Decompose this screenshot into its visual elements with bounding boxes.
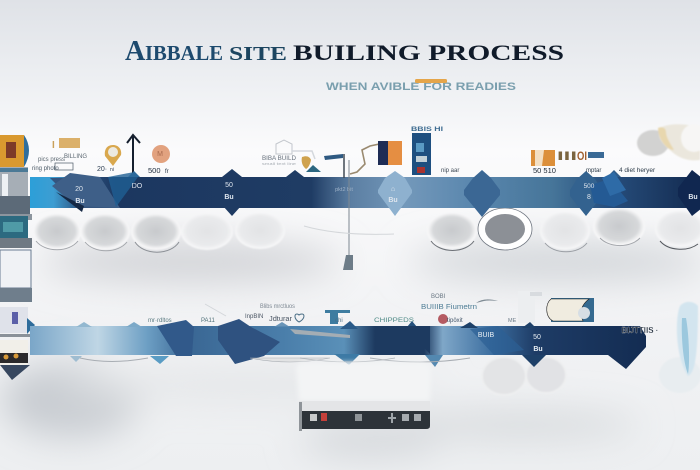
icon: grey house and lamp: small text line: [262, 161, 297, 166]
icon: gold pin: 20·: [97, 166, 107, 173]
icon: blue tablet: BBIS HI: [411, 126, 443, 133]
label: nip aar: [441, 168, 459, 174]
icon: gold pin: ni: [110, 167, 114, 173]
subtitle: [326, 79, 516, 93]
icon: folder with lamp: [350, 141, 402, 174]
icon: orange medal: fr: [165, 169, 169, 175]
bottom row icons and labels: BOBI: [431, 294, 446, 300]
bottom row icons and labels: PA11: [201, 318, 215, 324]
subtitle: WHEN AVIBLE FOR READIES: [326, 81, 516, 93]
card: [547, 298, 594, 322]
top dishes row: [33, 208, 700, 252]
band labels top: 500: [584, 183, 595, 190]
icon: orange badge: OI: [577, 149, 587, 163]
bottom row icons and labels: tipöxit: [447, 318, 463, 324]
bottom timeline band: [30, 319, 658, 369]
icon group: gold note: pics press: [38, 157, 65, 163]
icon group: gold note: I: [52, 140, 55, 151]
bottom row icons and labels: BUIIIB Fiumetrn: [421, 304, 477, 311]
bottom row icons and labels: ME: [508, 318, 517, 324]
title: IBBALE: [145, 41, 223, 65]
band labels top: ⌂: [391, 186, 395, 193]
band labels bottom: BUIB: [478, 332, 494, 339]
label: mptar: [586, 168, 601, 174]
band folds bottom: [290, 326, 524, 355]
band labels top: Bu: [688, 194, 698, 201]
icon group: gold note: BILLING: [64, 154, 87, 160]
band labels top: Bu: [224, 194, 234, 201]
icon: shell cluster: [637, 124, 700, 160]
bottom row icons and labels: Jdturar: [269, 316, 293, 323]
band labels top: [75, 182, 698, 205]
icon: grey house and lamp: [262, 140, 344, 178]
icon: hook pole: [127, 135, 140, 177]
title: BUILING PROCESS: [293, 40, 564, 65]
bottom row icons and labels: Blibs mrctluos: [260, 304, 295, 310]
band labels top: 50: [225, 182, 233, 189]
bottom row icons and labels: chi: [335, 318, 343, 324]
band labels top: Bu: [388, 197, 398, 204]
top row icons and labels: [32, 124, 700, 178]
band labels top: 20: [75, 186, 83, 193]
band shadow arcs: [80, 358, 470, 362]
band labels top: DO: [132, 183, 143, 190]
router device: [296, 362, 431, 431]
icon: red dot: [438, 314, 448, 324]
band labels top: Bu: [75, 198, 85, 205]
icon: orange badge: III: [557, 149, 577, 163]
pale chart block: [518, 291, 542, 323]
icon: orange medal: 500: [148, 166, 161, 175]
drop pole: [304, 160, 394, 270]
bottom row icons and labels: mr·rdltos: [148, 318, 172, 324]
right blue capsule: [659, 302, 700, 393]
bottom row icons and labels: [148, 291, 594, 324]
top timeline band: [30, 169, 700, 217]
title: [125, 36, 564, 67]
icon group: gold note: [32, 138, 87, 172]
band milestones bottom: [70, 319, 546, 367]
icon: gold pin: [97, 145, 121, 173]
band labels bottom: 50: [533, 334, 541, 341]
left photo column: [0, 135, 35, 380]
label: 4 diet heryer: [619, 167, 656, 174]
band milestones top: [214, 169, 700, 217]
title: A: [125, 36, 146, 67]
band labels bottom: Bu: [533, 346, 543, 353]
band labels bottom: BIJTTIIS ·: [622, 326, 658, 335]
icon: orange badge: [531, 149, 604, 175]
icon: orange badge: 50 510: [533, 166, 556, 175]
band labels top: pkt2 bit: [335, 187, 353, 193]
icon: orange medal: [148, 145, 170, 175]
band folds top: [50, 172, 628, 212]
dark dish: [478, 208, 532, 250]
band labels bottom: [478, 326, 658, 353]
bottom row icons and labels: CHIPPEDS: [374, 318, 414, 324]
bottom dishes: [482, 357, 566, 395]
bottom row icons and labels: InpBIN: [245, 314, 263, 320]
icon group: gold note: ring photo: [32, 166, 59, 172]
icon: blue tablet: [411, 126, 443, 175]
icon: heart: [295, 314, 304, 322]
soft shadows: [0, 242, 700, 456]
title: SITE: [229, 43, 287, 65]
icon: orange medal: M: [157, 151, 163, 158]
icon: grey house and lamp: BIBA BUILD: [262, 156, 297, 162]
band labels top: 8: [587, 194, 591, 201]
